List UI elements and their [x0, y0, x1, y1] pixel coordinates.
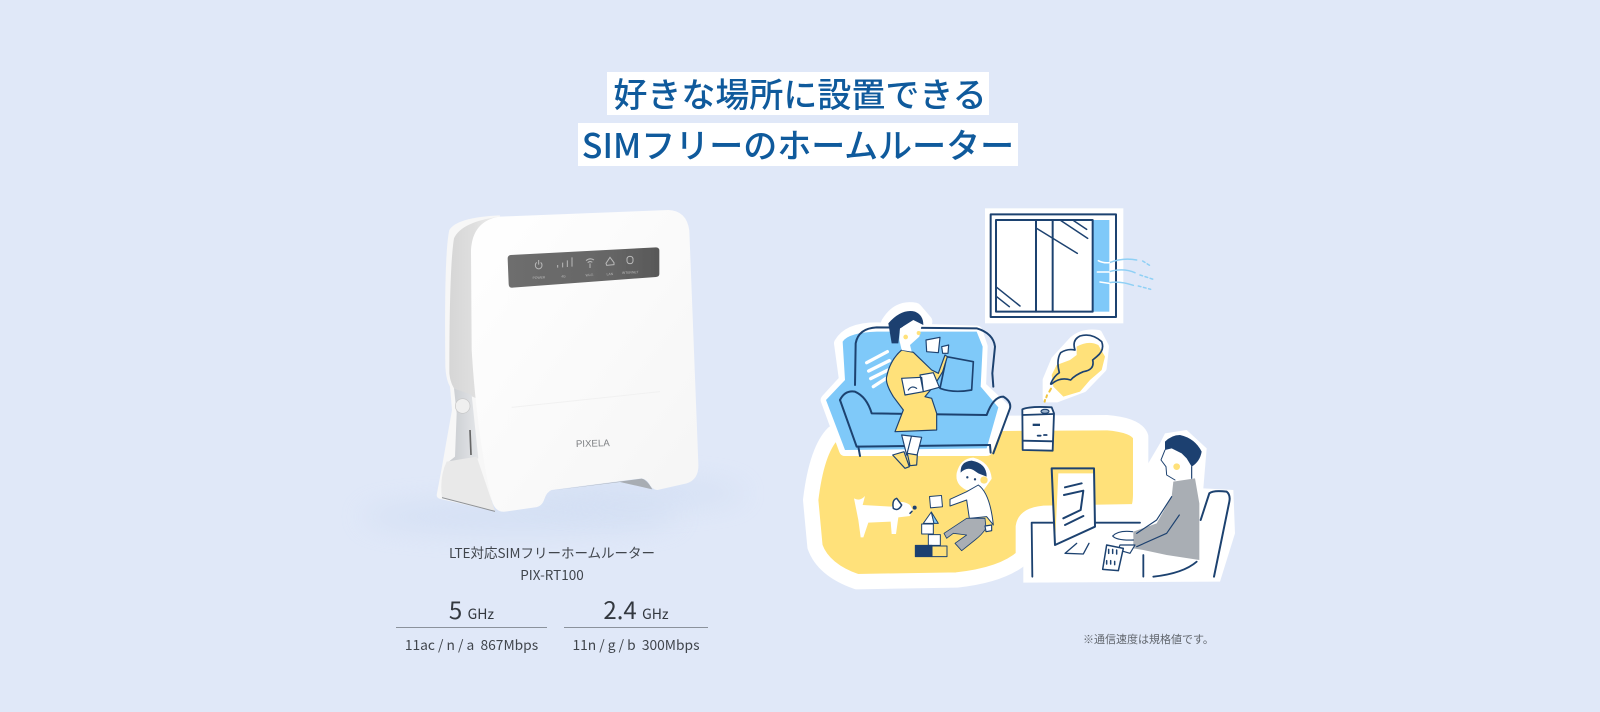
router LED panel: 4G [561, 274, 566, 279]
wind [1097, 259, 1153, 289]
router side body [437, 210, 698, 512]
router floor shadow [360, 478, 747, 533]
spec: 5 GHz [405, 591, 538, 654]
router LED panel: LAN [607, 272, 614, 276]
man [1133, 478, 1199, 560]
cushions [863, 348, 893, 393]
floor [811, 423, 1141, 582]
spec: 2.4 GHz [572, 591, 700, 654]
router LED panel [508, 247, 659, 288]
dog [854, 496, 917, 537]
title line 2: SIMフリーのホームルーター [582, 119, 1014, 168]
5 GHz value: 5 GHz [449, 591, 494, 626]
router LED panel: INTERNET [622, 270, 639, 275]
title line 1: 好きな場所に設置できる [613, 68, 987, 117]
humidifier [1022, 407, 1054, 451]
toy blocks [915, 495, 947, 557]
2.4 GHz value: 2.4 GHz [603, 591, 669, 626]
steam [1045, 333, 1105, 402]
keyboard [1103, 545, 1123, 571]
window [985, 208, 1123, 323]
woman [886, 311, 949, 468]
router side button [455, 399, 470, 413]
chair [1201, 491, 1230, 577]
product name: PIX-RT100 [520, 564, 584, 584]
router logo: PIXELA [576, 438, 610, 450]
5 GHz standards: 11ac / n / a 867Mbps [405, 634, 538, 654]
sofa [826, 309, 1010, 456]
router front face [471, 210, 698, 512]
2.4 GHz standards: 11n / g / b 300Mbps [572, 634, 700, 654]
man desk area [1023, 430, 1235, 583]
product name: LTE対応SIMフリーホームルーター [449, 542, 655, 562]
title [578, 68, 1018, 168]
product name [449, 542, 655, 584]
monitor [1052, 468, 1095, 545]
note: ※通信速度は規格値です。 [1083, 631, 1214, 647]
child [944, 459, 993, 551]
router LED panel: POWER [533, 275, 546, 280]
router LED panel: Wi-Fi [586, 273, 594, 277]
